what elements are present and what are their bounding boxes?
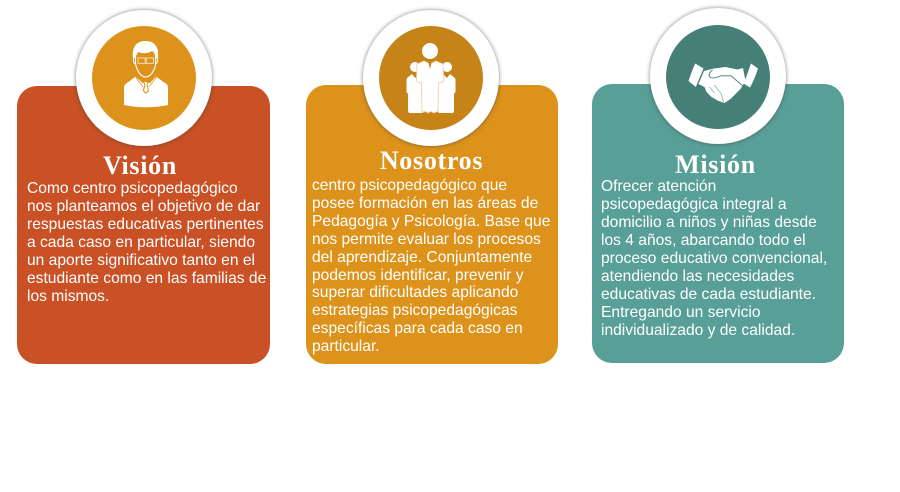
text: Misión description: individualizado y de calidad.: [601, 322, 795, 339]
heading: Misión: Misión: [675, 150, 756, 179]
text: Nosotros description: centro psicopedagógico que: [312, 177, 507, 194]
text: Visión description: estudiante como en las familias de: [27, 270, 266, 287]
text: Nosotros description: [312, 177, 550, 355]
heading: Visión: Visión: [103, 151, 177, 180]
text: Nosotros description: particular.: [312, 338, 380, 355]
text: Nosotros description: nos permite evaluar los procesos: [312, 231, 541, 248]
text: Nosotros description: estrategias psicopedagógicas: [312, 302, 517, 319]
text: Visión description: a cada caso en particular, siendo: [27, 234, 255, 251]
icon: handshake badge: [650, 8, 786, 144]
text: Misión description: educativas de cada estudiante.: [601, 286, 816, 303]
panel: Nosotros: [306, 85, 558, 364]
text: Visión description: Como centro psicopedagógico: [27, 180, 238, 197]
text: Visión description: [27, 180, 266, 305]
text: Nosotros description: superar dificultades aplicando: [312, 284, 518, 301]
text: Misión description: Ofrecer atención: [601, 178, 716, 195]
text: Visión description: los mismos.: [27, 288, 109, 305]
text: Misión description: proceso educativo convencional,: [601, 250, 827, 267]
text: Misión description: psicopedagógica integral a: [601, 196, 787, 213]
text: Nosotros description: posee formación en las áreas de: [312, 195, 538, 212]
text: Nosotros description: específicas para cada caso en: [312, 320, 523, 337]
text: Nosotros description: podemos identificar, prevenir y: [312, 267, 524, 284]
panel: Visión: [17, 86, 270, 364]
text: Misión description: atendiendo las necesidades: [601, 268, 794, 285]
text: Misión description: domicilio a niños y niñas desde: [601, 214, 817, 231]
text: Misión description: [601, 178, 827, 339]
text: Visión description: nos planteamos el objetivo de dar: [27, 198, 260, 215]
text: Visión description: respuestas educativas pertinentes: [27, 216, 264, 233]
icon: group of people badge: [363, 10, 499, 146]
icon: person with glasses badge: [76, 10, 212, 146]
text: Misión description: Entregando un servicio: [601, 304, 761, 321]
heading: Nosotros: Nosotros: [380, 146, 483, 175]
text: Visión description: un aporte significativo tanto en el: [27, 252, 255, 269]
text: Misión description: los 4 años, abarcando todo el: [601, 232, 806, 249]
text: Nosotros description: Pedagogía y Psicología. Base que: [312, 213, 550, 230]
text: Nosotros description: del aprendizaje. Conjuntamente: [312, 249, 532, 266]
panel: Misión: [592, 84, 844, 363]
